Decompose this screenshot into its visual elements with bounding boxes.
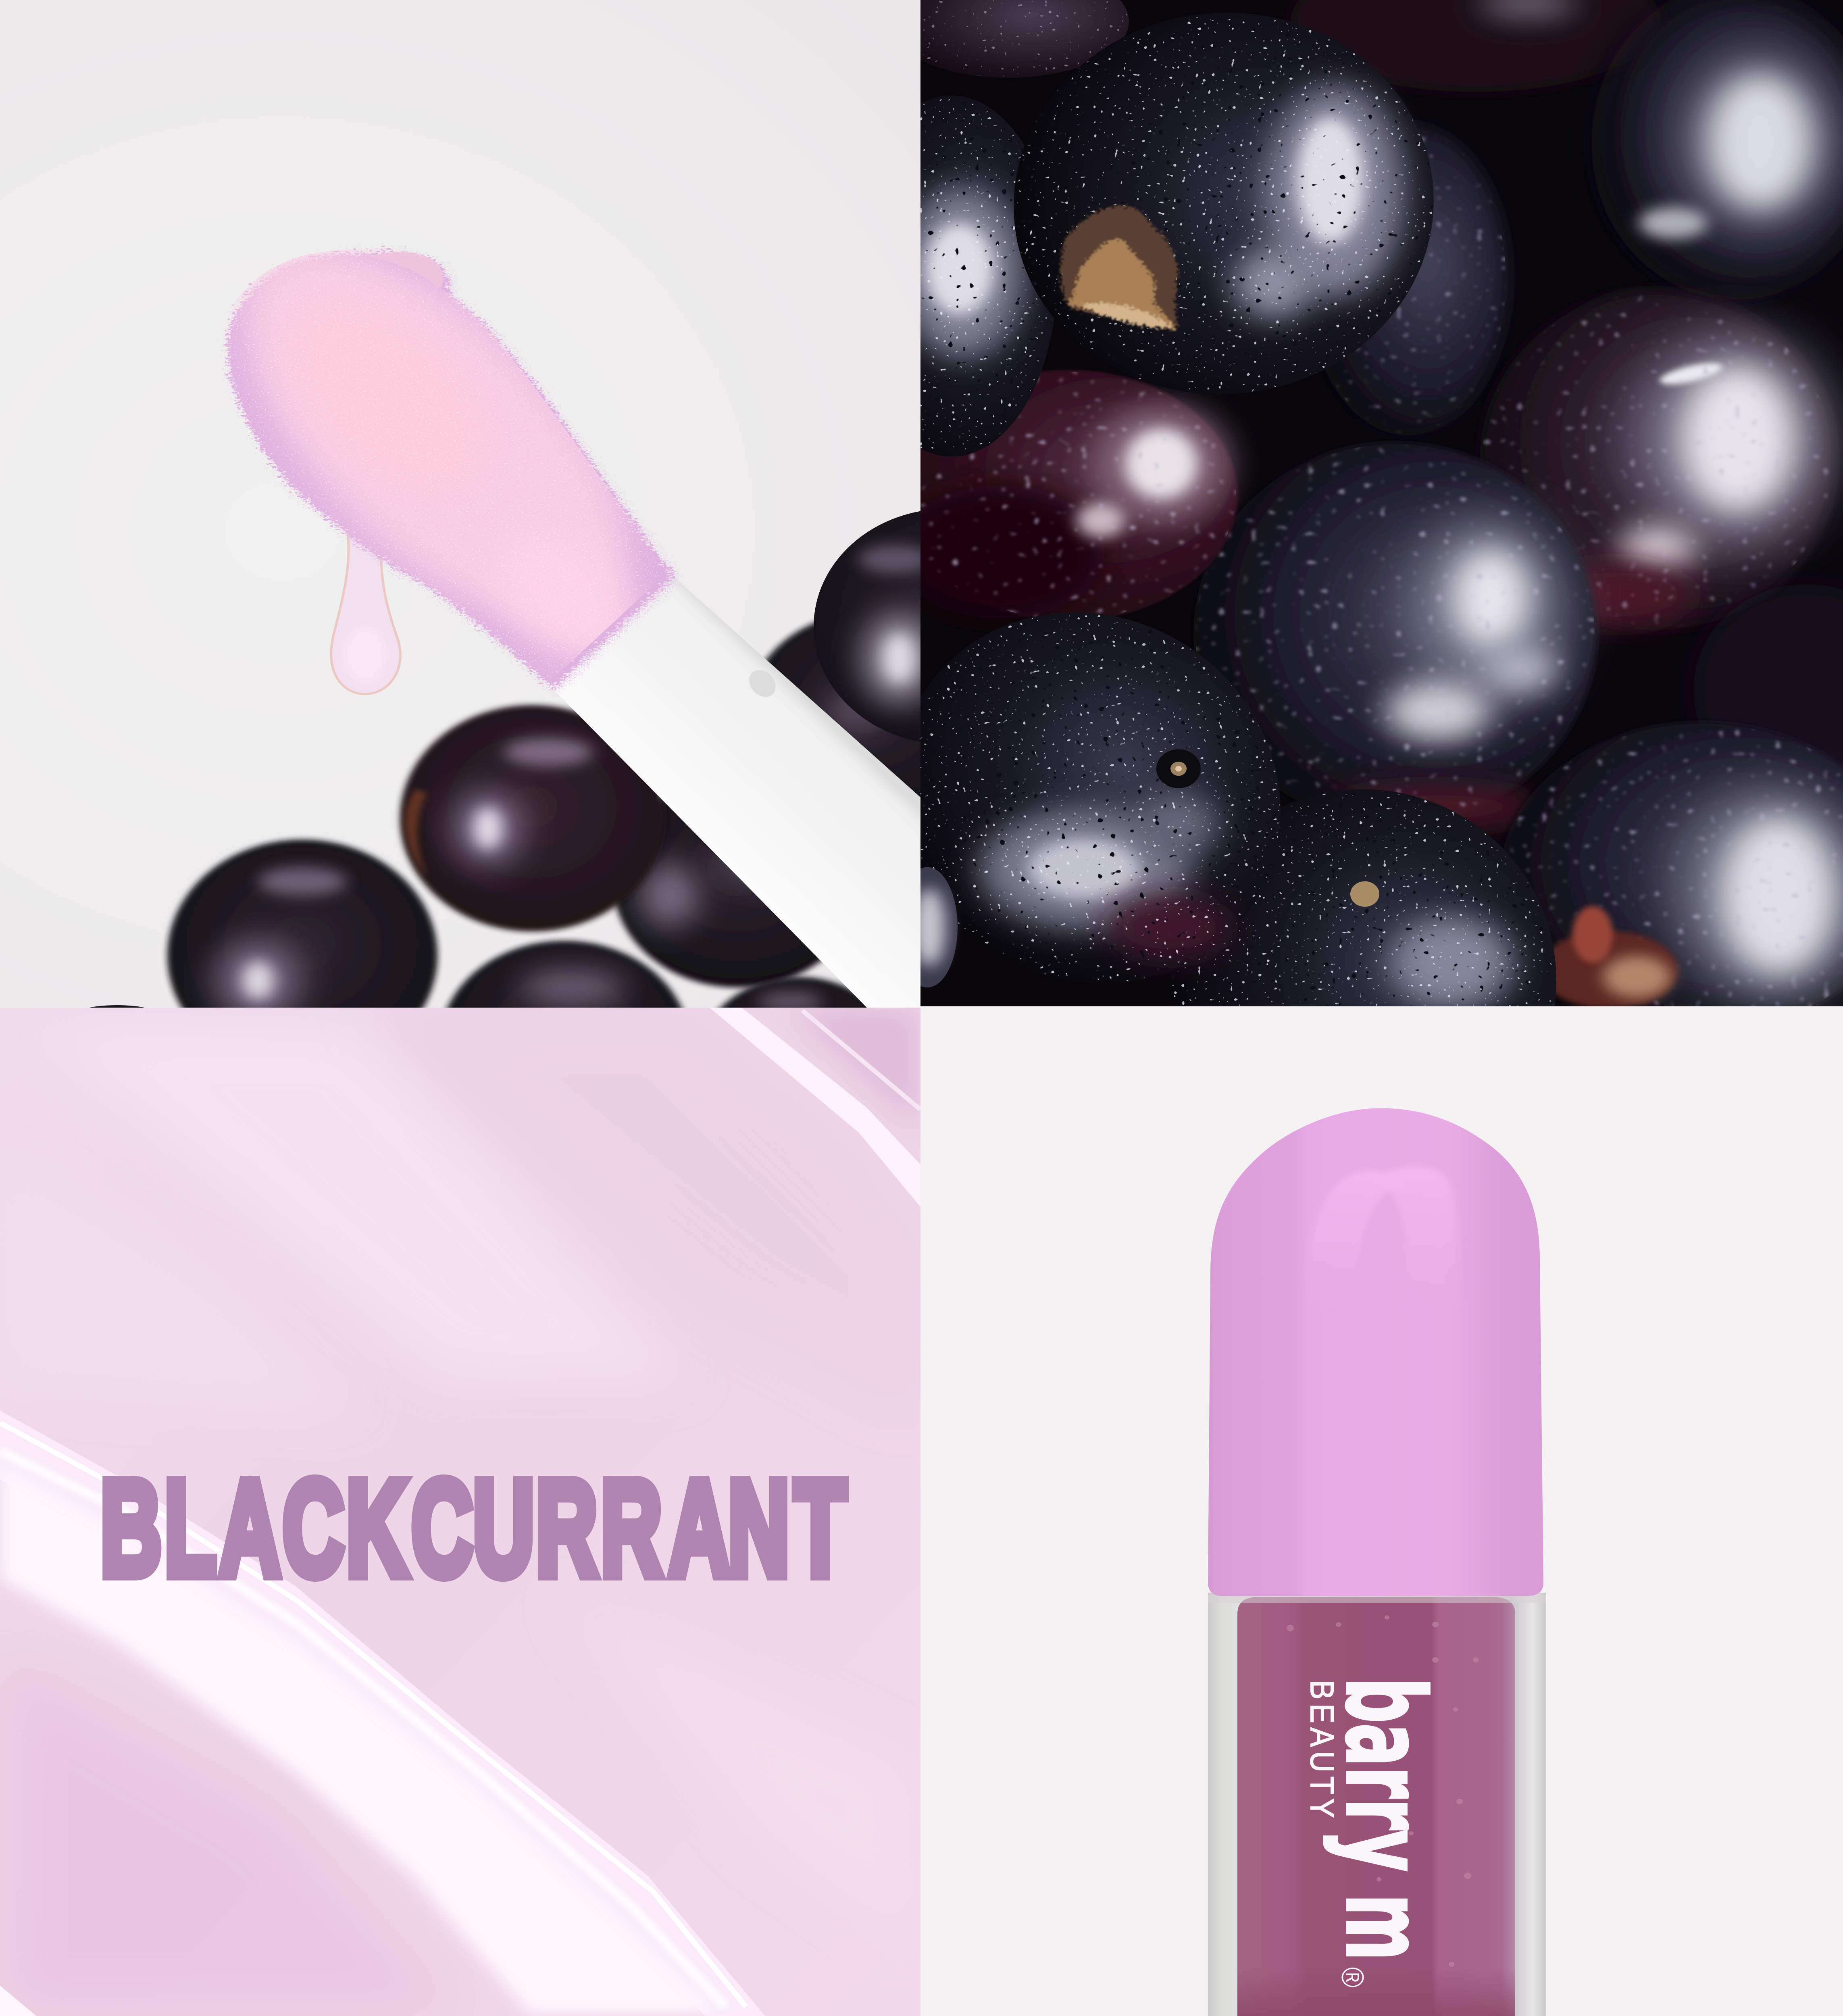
gloss liquid xyxy=(1237,1597,1515,2016)
berry: rear centre xyxy=(613,775,863,987)
applicator wand xyxy=(548,572,927,1008)
berry: bottom right xyxy=(698,977,899,1147)
berry: bottom right xyxy=(1500,722,1843,1033)
berry: middle with reddish edge xyxy=(400,705,664,931)
berry: top left xyxy=(887,0,1129,78)
icon: stem scar xyxy=(1350,881,1379,907)
berry: main in-focus xyxy=(973,0,1474,429)
berry: tiny bottom left xyxy=(81,1005,153,1019)
panel: product bottle xyxy=(920,1006,1843,2016)
air bubbles xyxy=(1287,1615,1479,1967)
cap highlights xyxy=(1305,1166,1459,1310)
gloss bead at tip xyxy=(371,252,443,288)
registered mark: ® xyxy=(1335,1967,1370,1987)
glossy highlight: upper right streaks xyxy=(710,1008,920,1207)
pale background xyxy=(920,1006,1843,2016)
berry: bottom left in-focus xyxy=(842,568,1335,1028)
berry: top centre xyxy=(1290,0,1661,92)
cluster of blackcurrants behind applicator xyxy=(81,508,1082,1148)
soft texture bands xyxy=(0,1008,920,2014)
icon: dried calyx xyxy=(1060,206,1178,331)
berry: top right cropped xyxy=(814,508,1082,744)
heading: BLACKCURRANT: BLACKCURRANT xyxy=(100,1453,846,1604)
droplet on wand xyxy=(744,666,781,701)
gloss drip xyxy=(331,531,400,694)
glossy highlight: lower diagonal band xyxy=(0,1410,765,2016)
berry: centre blurred xyxy=(1193,442,1597,828)
berry: bottom centre xyxy=(1169,789,1556,1172)
berry: far right lower blurred xyxy=(1693,584,1843,796)
panel: gloss texture with product name xyxy=(0,1008,920,2016)
berry: rear right xyxy=(746,612,988,825)
corner glint xyxy=(0,1986,36,2016)
berry: left edge xyxy=(846,96,1057,456)
berry: corner sliver xyxy=(897,867,958,987)
berry: lower left xyxy=(167,839,437,1072)
berry: behind main, blurred xyxy=(1306,124,1508,435)
lilac cap xyxy=(1208,1108,1543,1596)
icon: red calyx xyxy=(1540,906,1677,1009)
panel: lip gloss applicator xyxy=(0,0,920,1008)
berry: top right blurred xyxy=(1593,0,1843,297)
liquid shadow at base xyxy=(1237,1968,1515,2016)
icon: blossom end xyxy=(1156,749,1201,788)
berry: maroon left xyxy=(895,370,1238,621)
dark background xyxy=(920,0,1843,1006)
studio backdrop xyxy=(0,0,920,1008)
logo: barry m beauty xyxy=(1304,1677,1447,1987)
flocked applicator tip xyxy=(177,194,694,683)
glass tube xyxy=(1208,1593,1546,2016)
glass rim xyxy=(1208,1595,1546,1603)
gloss base xyxy=(0,1008,920,2016)
berry: right maroon blurred xyxy=(1480,290,1835,630)
panel: blackcurrant macro photo xyxy=(842,0,1843,1172)
berry: bottom centre xyxy=(439,941,689,1148)
sub-brand: BEAUTY xyxy=(1304,1680,1340,1818)
